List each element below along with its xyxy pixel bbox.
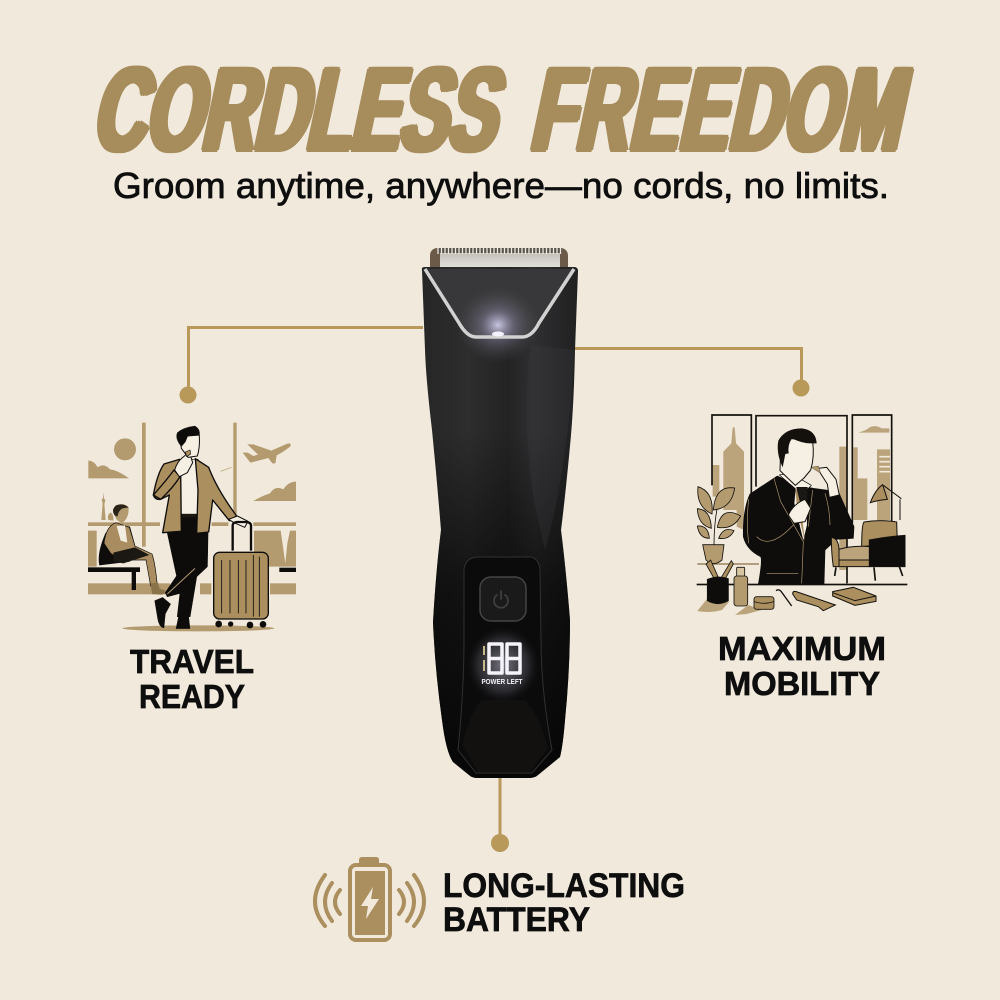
floor lamp — [870, 485, 901, 520]
shirt and tie — [779, 473, 811, 542]
hand at jaw — [175, 452, 193, 477]
suitcase — [214, 522, 268, 628]
raised sleeve — [153, 470, 180, 499]
subtitle: Groom anytime, anywhere—no cords, no limits. — [113, 165, 889, 206]
title: CORDLESS FREEDOM — [86, 44, 922, 176]
display glow — [467, 627, 539, 703]
jacket right side — [195, 459, 237, 533]
trimmer silver V trim — [425, 269, 574, 337]
table line — [697, 584, 907, 585]
connector: maximum mobility — [575, 347, 810, 396]
jacket — [743, 476, 854, 584]
trimmer — [797, 487, 807, 501]
trimmer control panel — [458, 557, 552, 773]
illustration: travel ready — [88, 423, 296, 631]
raised hand — [817, 467, 839, 497]
plant — [697, 487, 741, 564]
gold suit details — [747, 478, 830, 583]
product: cordless trimmer — [422, 248, 578, 778]
building windows — [879, 457, 890, 472]
shirt — [179, 459, 198, 516]
motion tick — [221, 467, 232, 471]
shoes — [155, 597, 171, 628]
label: travel ready — [130, 643, 254, 715]
label: long-lasting battery — [443, 867, 685, 939]
trimmer blade — [430, 248, 568, 267]
trimmer body — [422, 267, 578, 778]
label: maximum mobility: MOBILITY — [724, 665, 880, 702]
head — [180, 435, 199, 457]
trimmer head face — [428, 269, 572, 336]
power icon — [494, 591, 508, 608]
icon: battery with signal waves — [315, 858, 424, 940]
belt — [180, 514, 197, 518]
book — [833, 587, 876, 605]
neck and head — [780, 438, 813, 485]
tube — [793, 591, 835, 611]
airport window background — [88, 423, 296, 631]
standing man — [153, 426, 248, 629]
label: long-lasting battery: BATTERY — [443, 901, 590, 939]
hair — [177, 426, 200, 447]
brush cup — [706, 560, 733, 604]
trousers — [165, 515, 208, 617]
connector: battery — [491, 778, 509, 852]
power button — [480, 577, 526, 621]
connector: travel ready — [180, 326, 423, 404]
trouser accent — [167, 568, 195, 594]
panel reflection — [462, 700, 548, 772]
battery display digits — [484, 644, 520, 673]
illustration: maximum mobility — [697, 415, 907, 615]
trimmer in hand — [185, 450, 191, 457]
label: travel ready: TRAVEL — [130, 643, 254, 680]
jacket left side — [153, 459, 181, 533]
seated traveller — [99, 504, 165, 595]
window frames — [712, 415, 892, 583]
hand on handle — [229, 516, 248, 527]
jar — [754, 597, 774, 609]
man in suit — [743, 428, 854, 584]
bench — [88, 567, 296, 572]
hand holding trimmer — [788, 499, 811, 523]
table shadows — [697, 599, 729, 612]
label: maximum mobility: MAXIMUM — [718, 630, 886, 667]
armchair — [831, 521, 905, 581]
skyline — [713, 426, 890, 570]
label: long-lasting battery: LONG-LASTING — [443, 867, 685, 905]
sill — [697, 563, 759, 565]
label: maximum mobility — [718, 630, 886, 702]
display label: POWER LEFT — [482, 679, 523, 686]
trimmer head glow — [456, 287, 540, 363]
bottle — [734, 567, 748, 606]
trimmer body highlight — [527, 345, 574, 550]
trimmer in raised hand — [811, 466, 821, 473]
hair — [778, 428, 817, 467]
plane — [243, 443, 291, 463]
label: travel ready: READY — [139, 678, 245, 715]
razor — [776, 590, 792, 606]
trimmer LED — [492, 332, 504, 336]
